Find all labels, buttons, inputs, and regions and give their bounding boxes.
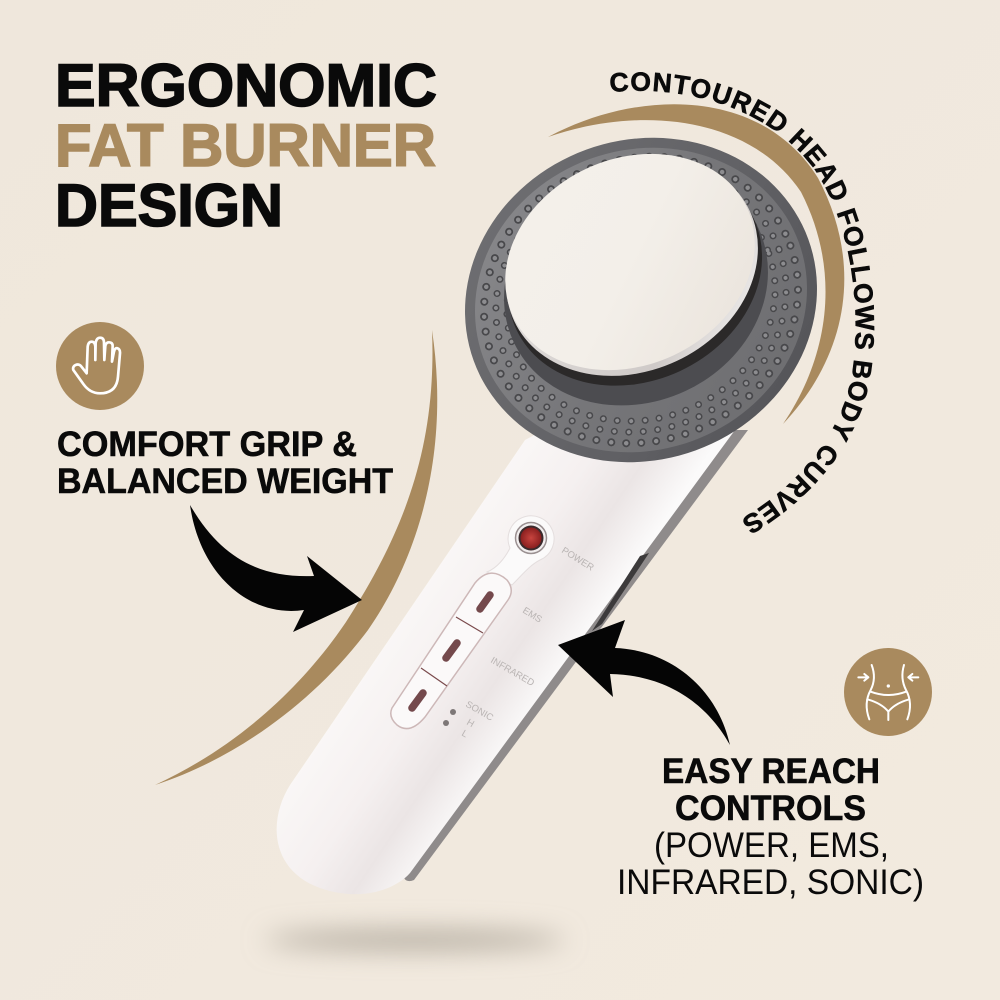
text: easy reach controls: (POWER, EMS, <box>654 826 889 865</box>
button labels: EMS <box>520 605 544 625</box>
head dotted ring <box>432 102 850 498</box>
title: DESIGN <box>55 172 283 239</box>
button labels: POWER <box>559 545 596 574</box>
text: comfort grip <box>57 425 393 501</box>
text: easy reach controls: EASY REACH <box>662 752 880 791</box>
arrow: grip <box>190 505 362 632</box>
indicator dots <box>443 709 456 726</box>
button labels: INFRARED <box>488 655 536 689</box>
device handle body <box>277 400 735 894</box>
text: easy reach controls: CONTROLS <box>675 789 866 828</box>
device handle side band <box>404 430 748 881</box>
head rim <box>419 89 863 511</box>
text: easy reach controls <box>617 752 924 902</box>
curved caption: CONTOURED HEAD FOLLOWS BODY CURVES <box>610 72 874 533</box>
text: comfort grip: BALANCED WEIGHT <box>57 462 393 501</box>
button labels: L <box>460 728 470 740</box>
device <box>277 89 863 894</box>
chrome edge <box>470 116 794 416</box>
title: ERGONOMIC <box>55 52 437 119</box>
text: comfort grip: COMFORT GRIP & <box>57 425 357 464</box>
gold arc: top right <box>548 104 844 424</box>
title <box>55 52 437 239</box>
icon: waist <box>844 648 932 736</box>
arrow: controls <box>558 620 730 745</box>
head collar <box>464 122 808 448</box>
control panel buttons <box>391 573 511 729</box>
gold arc: left <box>155 330 437 785</box>
button labels: H <box>464 717 476 730</box>
text: easy reach controls: INFRARED, SONIC) <box>617 863 924 902</box>
floor shadow <box>265 930 565 950</box>
power button <box>487 516 554 585</box>
metal plate <box>470 114 790 410</box>
side port <box>592 553 649 631</box>
title: FAT BURNER <box>55 112 436 179</box>
button labels <box>460 545 596 740</box>
button labels: SONIC <box>464 699 495 724</box>
icon: hand <box>56 322 144 410</box>
